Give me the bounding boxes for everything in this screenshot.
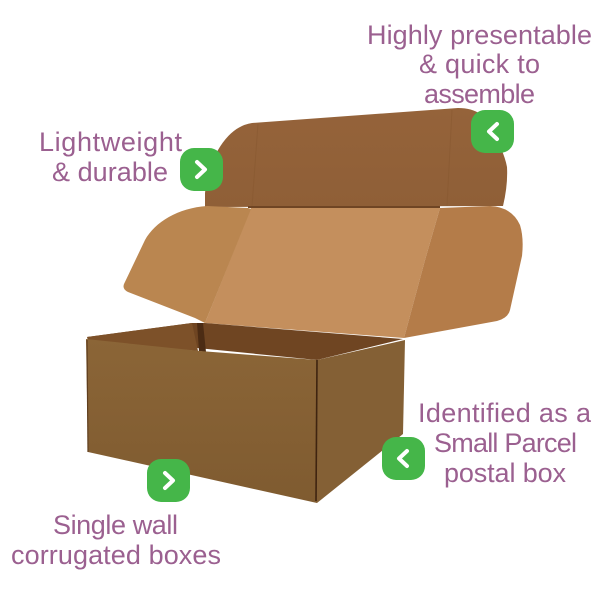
- text: single wall: [11, 510, 221, 570]
- lid left flap: [124, 206, 251, 323]
- box right side: [317, 340, 405, 503]
- text: highly presentable: & quick to: [419, 49, 540, 79]
- lid centre panel: [205, 208, 440, 338]
- text: small parcel: [418, 398, 592, 488]
- box interior: [87, 323, 403, 360]
- text: small parcel: postal box: [444, 458, 566, 488]
- text: lightweight: Lightweight: [39, 127, 182, 157]
- box front side: [86, 339, 317, 503]
- text: lightweight: & durable: [52, 157, 168, 187]
- badge: lightweight: [180, 148, 223, 191]
- text: single wall: Single wall: [53, 510, 178, 540]
- illustration: open cardboard box: [86, 108, 523, 503]
- text: highly presentable: [367, 20, 592, 109]
- text: lightweight: [39, 127, 182, 187]
- back lid: [205, 108, 507, 207]
- text: small parcel: Identified as a: [418, 398, 592, 428]
- text: highly presentable: assemble: [424, 79, 535, 109]
- lid right flap: [404, 206, 523, 338]
- badge: presentable: [471, 110, 514, 153]
- inside of lid: [124, 206, 523, 338]
- badge: single wall: [147, 459, 190, 502]
- badge: small parcel: [382, 437, 425, 480]
- text: small parcel: Small Parcel: [434, 428, 577, 458]
- text: highly presentable: Highly presentable: [367, 20, 592, 50]
- text: single wall: corrugated boxes: [11, 540, 221, 570]
